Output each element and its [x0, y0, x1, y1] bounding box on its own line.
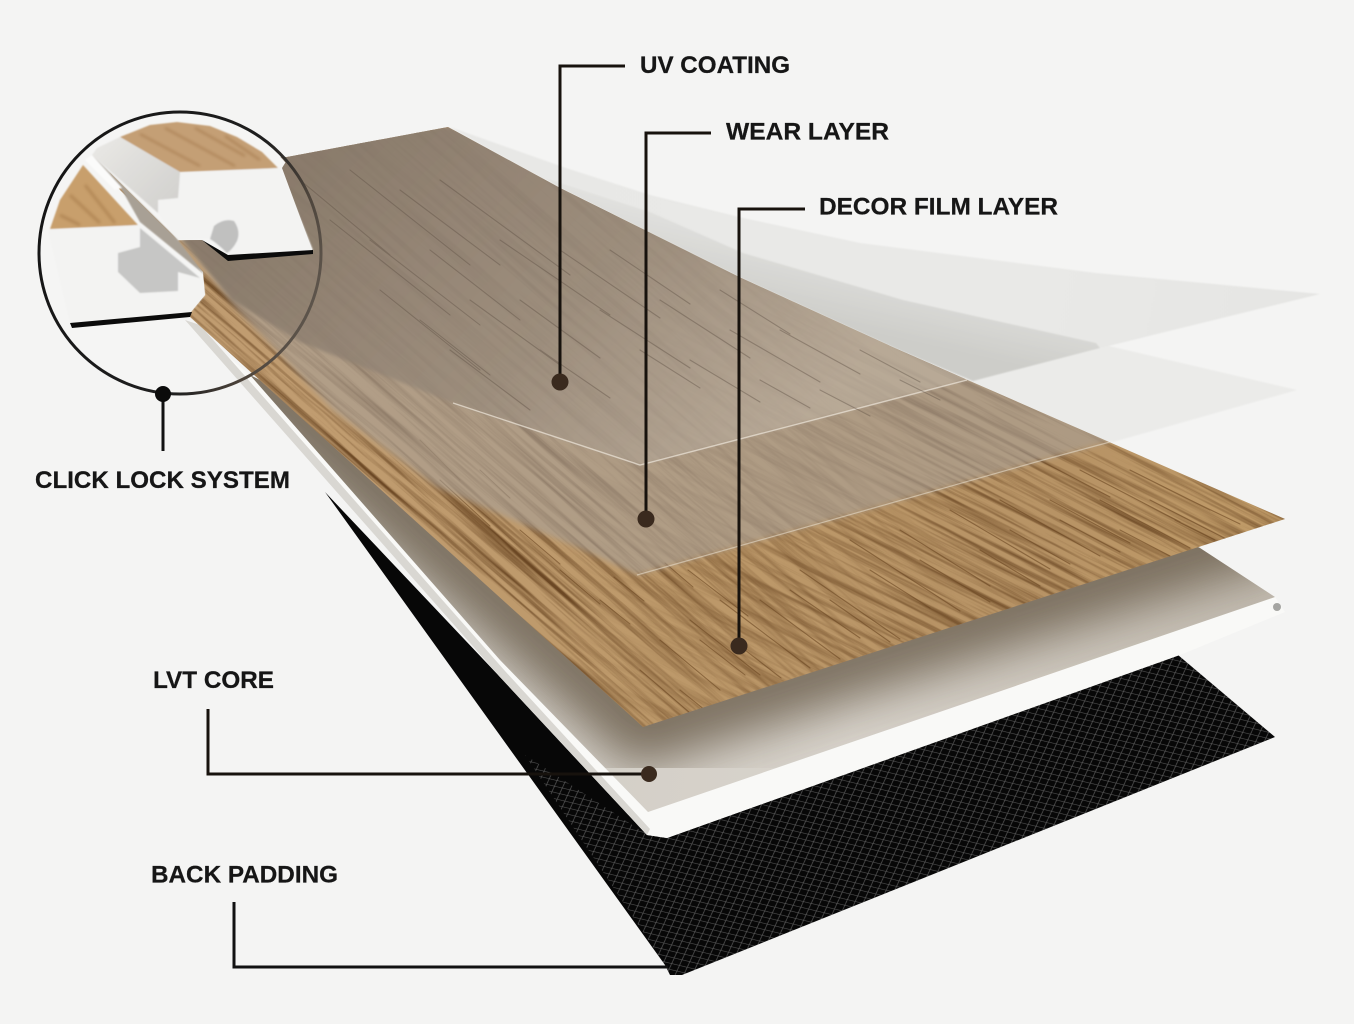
callout: wear layer: WEAR LAYER — [726, 118, 889, 146]
callout: decor film layer — [730, 194, 1058, 654]
layer: UV overlay — [182, 127, 968, 466]
callout: decor film layer: DECOR FILM LAYER — [819, 194, 1058, 220]
callout: click lock system: CLICK LOCK SYSTEM — [35, 467, 290, 494]
callout: LVT core: LVT CORE — [153, 667, 274, 694]
callout: LVT core — [153, 667, 657, 782]
callout: wear layer — [638, 118, 889, 528]
UV coating sheet overhang — [450, 127, 1320, 381]
layer: decor film wood — [100, 127, 1285, 727]
callout: back padding — [151, 862, 668, 967]
inset: ring — [39, 112, 321, 394]
layer: wear overlay — [180, 128, 1110, 576]
inset: cutaway of planks — [48, 122, 313, 328]
callout: click lock system — [35, 386, 290, 494]
overlapping sheets band — [545, 178, 1100, 381]
callout: back padding: BACK PADDING — [151, 862, 338, 888]
callout: UV coating — [552, 52, 790, 390]
layer: translucent film overhang — [448, 127, 1320, 442]
layer: LVT core — [185, 317, 1285, 838]
layer: back padding — [325, 492, 1275, 975]
wear sheet overhang — [448, 127, 1297, 442]
panel: click lock inset — [38, 110, 322, 396]
inset background — [106, 156, 312, 312]
wood grain lines — [420, 440, 1240, 714]
callout: UV coating: UV COATING — [640, 52, 790, 79]
